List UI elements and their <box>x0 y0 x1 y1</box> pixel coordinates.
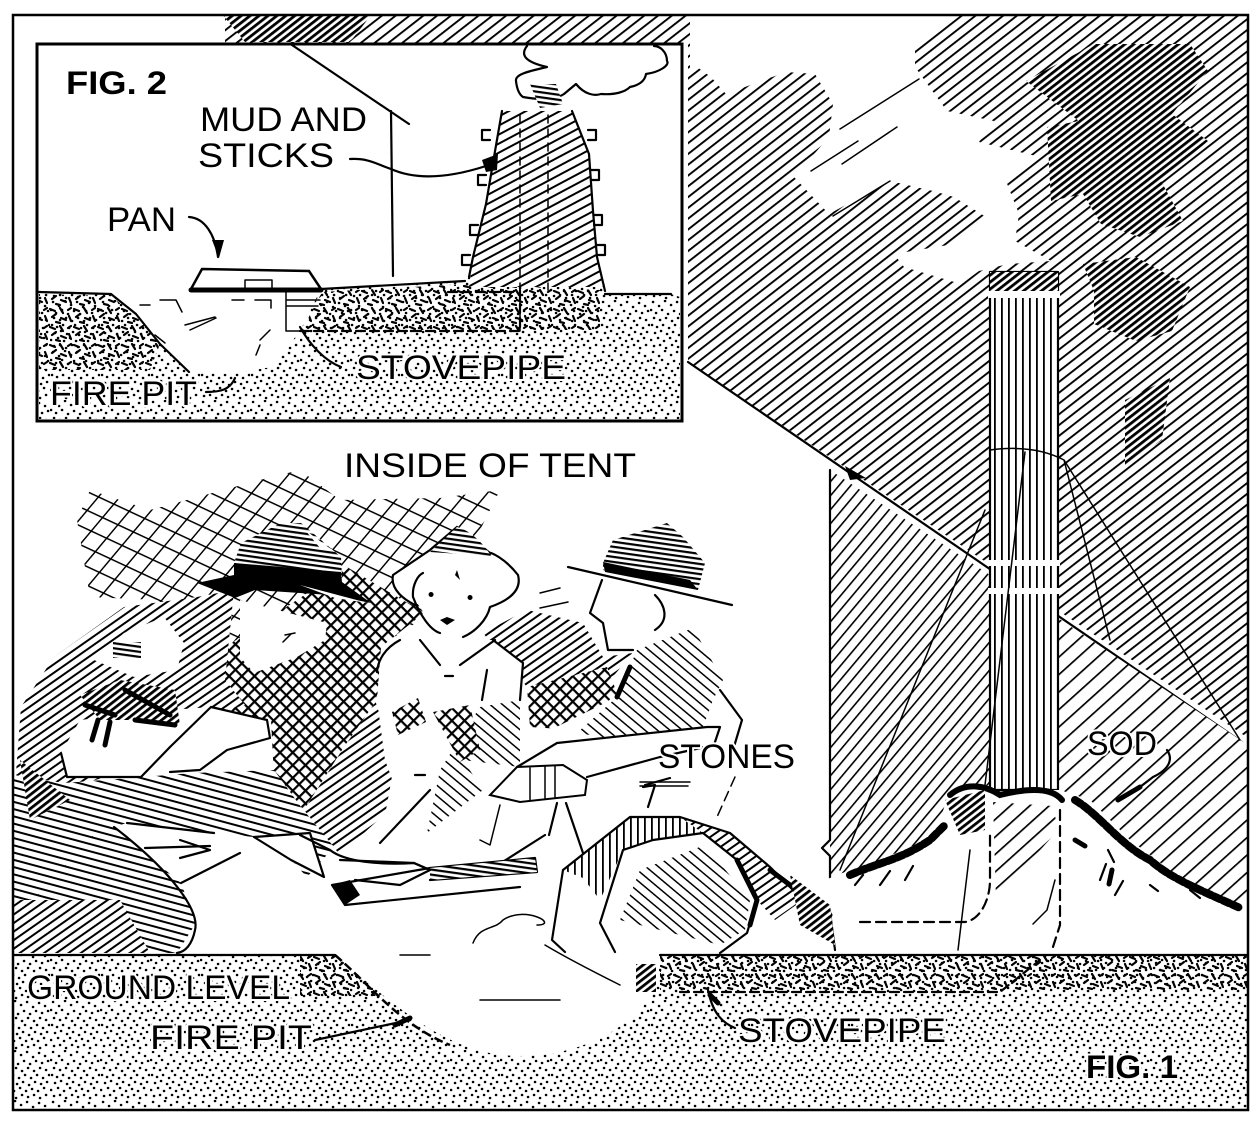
label: mud and sticks: MUD AND <box>200 101 367 139</box>
hatched sky with smoke gap <box>225 14 1248 738</box>
sod mound <box>825 785 1240 952</box>
panel: scene inside tent <box>14 447 1178 1085</box>
label: mud and sticks <box>198 101 367 175</box>
panel: Fig. 1 tent exterior <box>222 14 1248 952</box>
thigh white <box>114 823 254 883</box>
label: mud and sticks: STICKS <box>198 137 334 175</box>
eyes and mouth <box>429 570 473 625</box>
icon: pan <box>191 269 321 290</box>
inset stovepipe dashes <box>300 287 520 331</box>
hat <box>197 523 371 603</box>
arm <box>557 727 720 777</box>
face <box>240 600 327 673</box>
label: Fig. 2: FIG. 2 <box>66 65 167 101</box>
scout on left <box>14 523 430 953</box>
cuff and hand <box>490 765 587 802</box>
label: ground level: GROUND LEVEL <box>27 969 290 1007</box>
inset chimney of mud and sticks <box>462 111 605 331</box>
inset ground <box>39 277 680 419</box>
mud and sticks leader <box>350 159 486 176</box>
scout on right <box>480 523 742 870</box>
label: Fig. 1: FIG. 1 <box>1086 1049 1178 1085</box>
upper back light <box>94 617 184 677</box>
arm and hand <box>254 833 324 877</box>
background sparse crosshatch <box>77 470 500 700</box>
panel: ground strip with fire pit <box>14 914 1248 1110</box>
label: pan: PAN <box>107 201 176 239</box>
tent edge line <box>688 362 1242 742</box>
inset smoke <box>516 46 668 108</box>
sod leader <box>1140 750 1170 787</box>
inset fire pit scribbles <box>140 289 320 355</box>
inset stovepipe leader <box>300 327 341 367</box>
label: inside of tent: INSIDE OF TENT <box>344 447 636 485</box>
shirt hatching <box>577 628 723 737</box>
hat <box>603 523 705 590</box>
inset fire pit leader <box>206 378 235 392</box>
label: sod: SOD <box>1087 725 1157 763</box>
label: stovepipe: STOVEPIPE <box>356 349 566 387</box>
lower body hatching <box>14 770 334 953</box>
back hatching <box>14 590 245 800</box>
label: stovepipe: STOVEPIPE <box>738 1012 946 1050</box>
stones <box>552 777 835 953</box>
smoke strokes <box>811 79 919 216</box>
label: stones: STONES <box>658 738 795 776</box>
plank <box>332 858 537 905</box>
dark hands knot <box>80 680 180 725</box>
stone leader <box>717 777 735 817</box>
hat <box>393 527 519 607</box>
inset tent lines <box>292 45 409 276</box>
label: fire pit: FIRE PIT <box>50 375 197 413</box>
stovepipe <box>988 272 1060 790</box>
scout in center <box>375 527 523 843</box>
face <box>413 573 490 637</box>
light hatching behind scouts <box>304 700 400 855</box>
pan arrow <box>189 217 218 257</box>
legs and lines <box>490 778 670 870</box>
pan arrow head <box>212 240 224 258</box>
panel: Fig. 2 inset <box>37 44 682 421</box>
label: fire pit: FIRE PIT <box>150 1019 312 1057</box>
guy lines <box>840 448 1240 870</box>
dense net behind scouts <box>221 567 424 810</box>
hatched lower right of stovepipe <box>1058 618 1248 908</box>
dark smoke patches <box>222 14 1208 465</box>
hatched lower left of stovepipe <box>830 470 990 878</box>
face <box>590 580 664 650</box>
arrow mark on tent edge <box>845 466 866 480</box>
forearm and hands <box>61 707 270 777</box>
sod arrow <box>1118 787 1140 800</box>
